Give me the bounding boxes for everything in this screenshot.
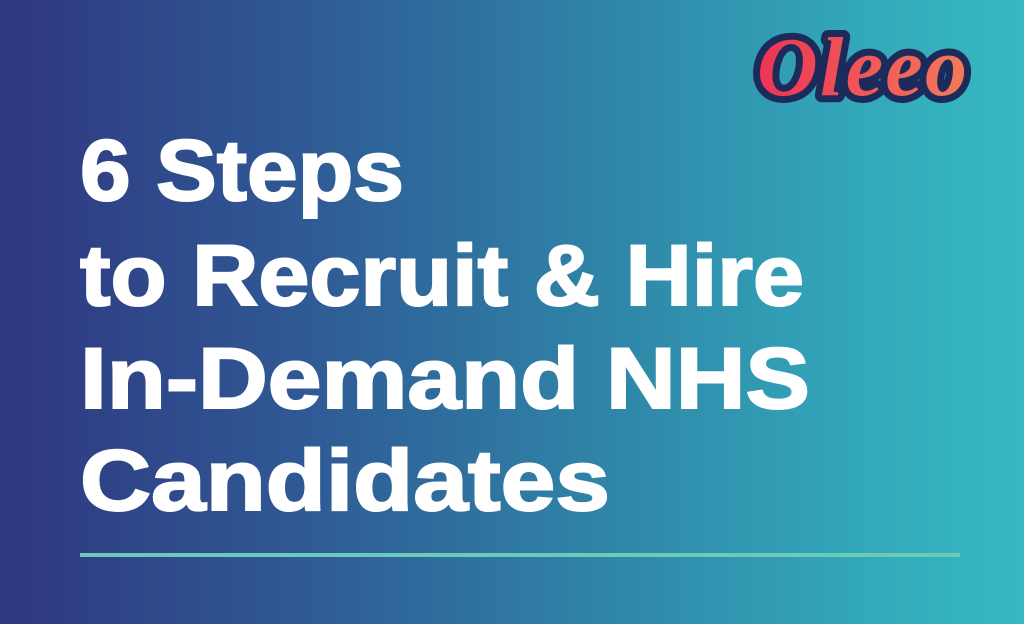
title: to Recruit & Hire: [80, 228, 804, 324]
divider line: [80, 553, 960, 557]
title: In-Demand NHS: [80, 331, 810, 427]
logo: Oleeo: Oleeo: [757, 21, 967, 114]
title: 6 Steps: [80, 123, 404, 219]
title: Candidates: [80, 433, 610, 529]
